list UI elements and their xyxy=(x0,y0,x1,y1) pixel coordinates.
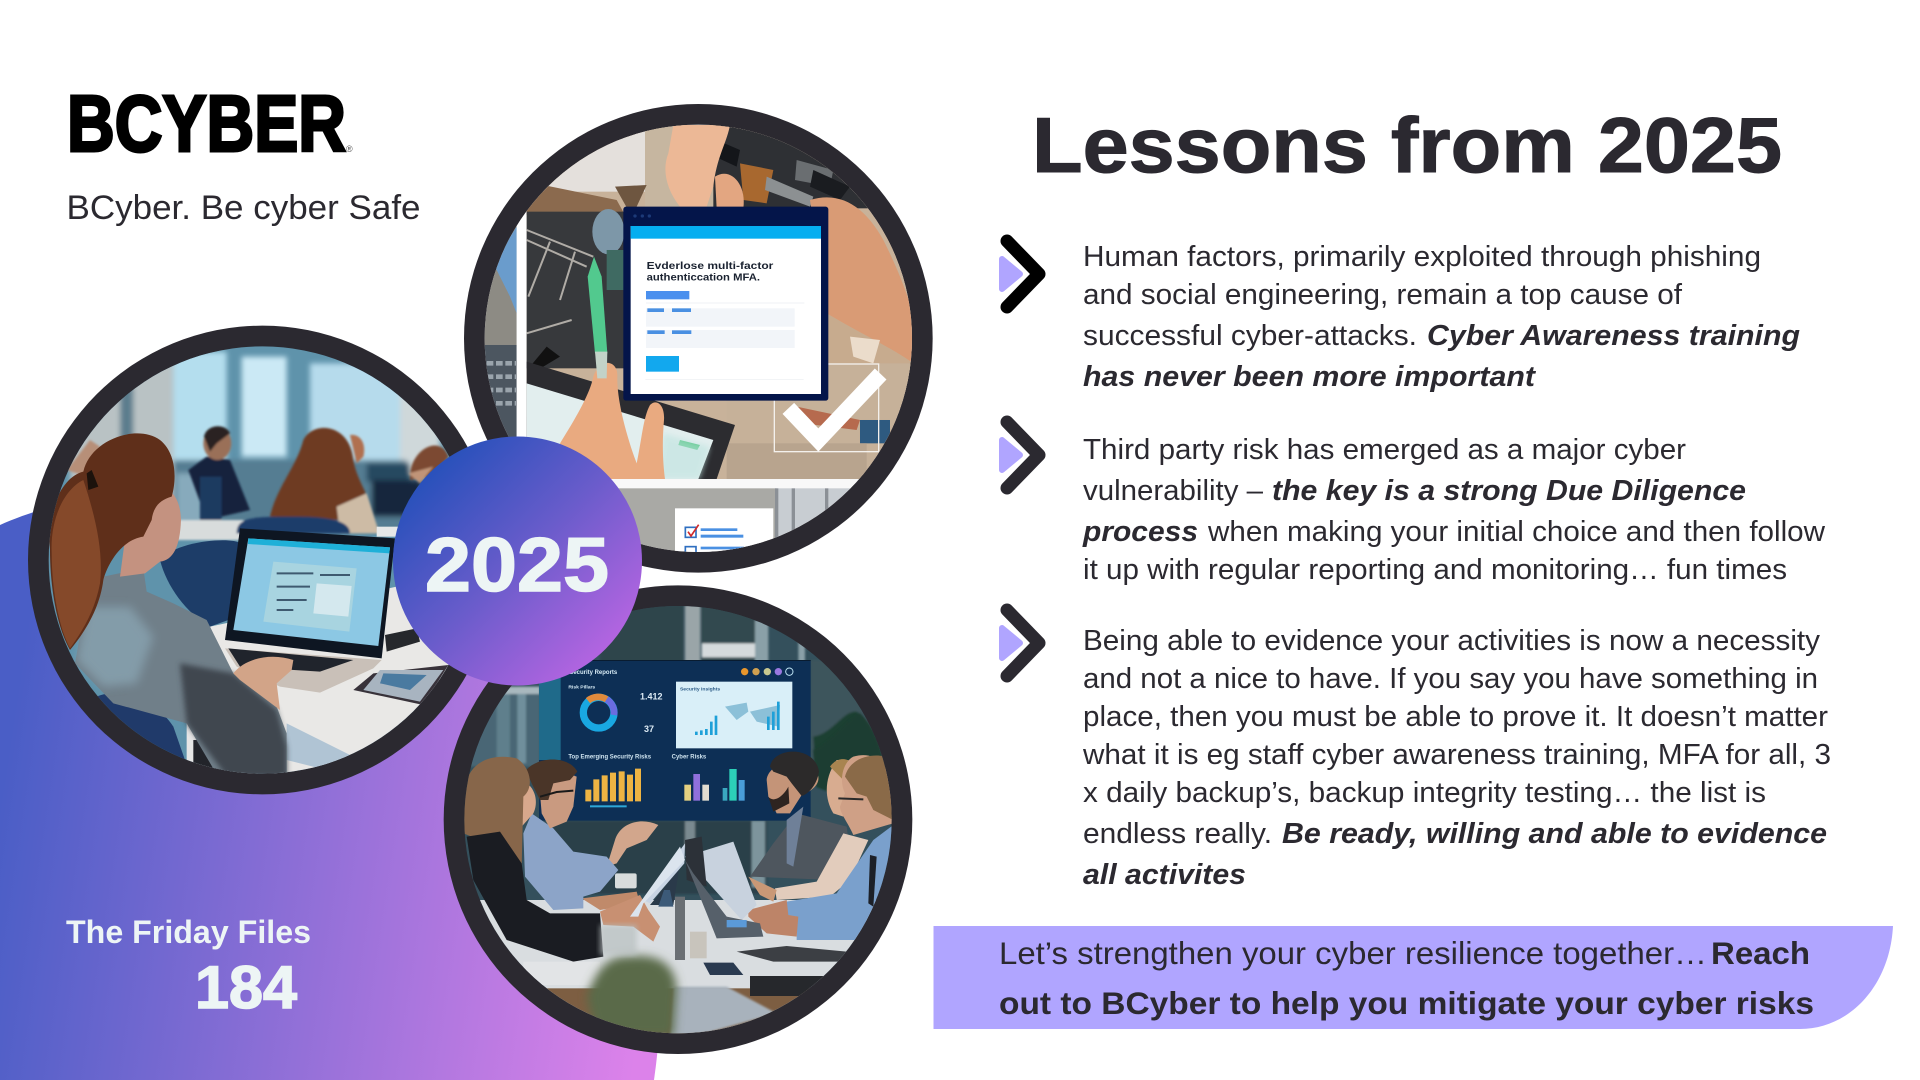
text block: human factors: Human factors, primarily exploited through phishing xyxy=(1083,241,1761,273)
text block: third party risk: Third party risk has emerged as a major cyber xyxy=(1083,434,1686,466)
text block: human factors: and social engineering, remain a top cause of xyxy=(1083,279,1683,311)
series label: The Friday Files xyxy=(66,914,311,950)
text block: third party risk: when making your initial choice and then follow xyxy=(1207,516,1826,548)
series label xyxy=(66,914,311,1021)
photo circle: MFA screen and hands xyxy=(460,100,940,580)
text block: third party risk: it up with regular reporting and monitoring… fun times xyxy=(1083,554,1787,586)
gradient background shape xyxy=(0,488,661,1080)
callout banner: out to BCyber to help you mitigate your cyber risks xyxy=(999,985,1814,1021)
text block: third party risk: process xyxy=(1082,516,1198,548)
logo: BCYBER: BCYBER xyxy=(67,79,346,168)
text block: evidence: endless really. xyxy=(1083,818,1272,850)
photo circle: MFA screen and hands: authenticcation MFA. xyxy=(647,272,760,283)
photo circle: team at conference table with dashboard: Security Reports xyxy=(569,670,618,676)
text block: human factors: successful cyber-attacks. xyxy=(1083,320,1417,352)
text block: evidence: what it is eg staff cyber awareness training, MFA for all, 3 xyxy=(1082,739,1831,771)
year badge: 2025 xyxy=(425,523,609,608)
photo circle: team at conference table with dashboard: 1.412 xyxy=(640,691,662,701)
callout banner: Let’s strengthen your cyber resilience together… xyxy=(999,935,1707,971)
text block: evidence: place, then you must be able to prove it. It doesn’t matter xyxy=(1083,701,1828,733)
photo circle: team at conference table with dashboard: 37 xyxy=(644,724,654,734)
callout banner: Reach xyxy=(1711,935,1810,971)
text block: evidence: all activites xyxy=(1083,859,1246,891)
photo circle: team at conference table with dashboard: Cyber Risks xyxy=(672,755,707,761)
text block: human factors xyxy=(1083,241,1800,393)
text block: evidence: x daily backup’s, backup integrity testing… the list is xyxy=(1083,777,1766,809)
text block: evidence: Being able to evidence your activities is now a necessity xyxy=(1083,625,1821,657)
text block: third party risk xyxy=(1082,434,1826,586)
callout banner xyxy=(934,926,1893,1029)
icon: chevron 3 xyxy=(1002,610,1039,676)
photo circle: team at conference table with dashboard: Risk Pillars xyxy=(568,685,595,691)
photo circle: team at conference table with dashboard: Security insights xyxy=(680,687,720,693)
photo circle: team at conference table with dashboard: Top Emerging Security Risks xyxy=(568,755,652,761)
photo circle: team at conference table with dashboard xyxy=(440,580,920,1060)
text block: evidence xyxy=(1082,625,1831,891)
year badge xyxy=(393,436,642,686)
photo circle: woman working at a laptop xyxy=(28,326,468,794)
tagline: BCyber. Be cyber Safe xyxy=(66,189,420,227)
series label: 184 xyxy=(195,954,298,1021)
text block: human factors: Cyber Awareness training xyxy=(1427,320,1800,352)
logo: BCYBER: ® xyxy=(346,144,353,154)
text block: evidence: and not a nice to have. If you say you have something in xyxy=(1083,663,1818,695)
title: Lessons from 2025 xyxy=(1032,101,1782,189)
text block: evidence: Be ready, willing and able to evidence xyxy=(1282,818,1827,850)
icon: chevron 1 xyxy=(1002,241,1039,307)
photo circle: MFA screen and hands: Evderlose multi-factor xyxy=(647,261,773,272)
text block: human factors: has never been more important xyxy=(1083,361,1536,393)
icon: chevron 2 xyxy=(1002,422,1039,488)
text block: third party risk: vulnerability – xyxy=(1083,475,1264,507)
text block: third party risk: the key is a strong Due Diligence xyxy=(1272,475,1746,507)
